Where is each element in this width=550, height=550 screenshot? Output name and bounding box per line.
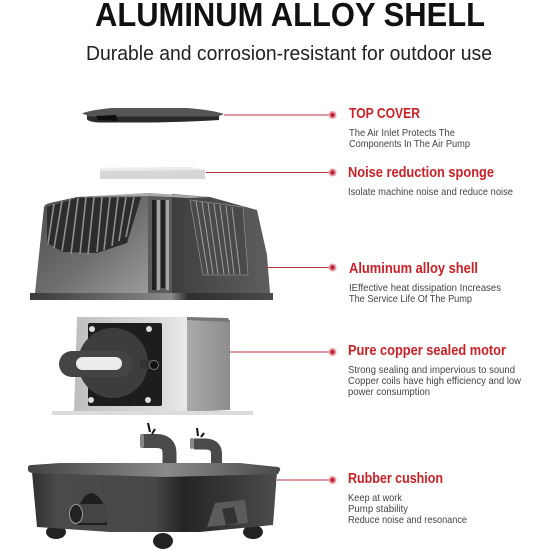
leader line: shell [266, 264, 336, 272]
label: aluminum alloy shell: Aluminum alloy shell [349, 260, 478, 277]
label: pure copper sealed motor: Pure copper sealed motor [348, 342, 506, 359]
label: pure copper sealed motor: Copper coils have high efficiency and low [348, 375, 521, 387]
label: aluminum alloy shell: The Service Life Of The Pump [349, 293, 472, 305]
label: pure copper sealed motor: Strong sealing and impervious to sound [348, 364, 515, 376]
part: top cover [82, 108, 224, 122]
label: top cover [349, 105, 470, 150]
leader line: cushion [277, 476, 336, 484]
label: rubber cushion: Rubber cushion [348, 470, 443, 487]
label: rubber cushion: Reduce noise and resonance [348, 514, 467, 526]
label: top cover: TOP COVER [349, 105, 420, 122]
label: noise reduction sponge: Isolate machine noise and reduce noise [348, 186, 513, 198]
subtitle: Durable and corrosion-resistant for outdoor use [86, 43, 492, 65]
part: noise reduction sponge [100, 167, 205, 179]
label: top cover: Components In The Air Pump [349, 138, 470, 150]
label: rubber cushion: Pump stability [348, 503, 409, 515]
label: noise reduction sponge: Noise reduction sponge [348, 164, 494, 181]
leader line: sponge [206, 168, 336, 176]
label: pure copper sealed motor [348, 342, 521, 398]
leader line: top cover [224, 111, 336, 119]
label: noise reduction sponge [348, 164, 513, 198]
part: pure copper sealed motor [52, 317, 253, 415]
part: rubber cushion base [28, 423, 280, 549]
label: aluminum alloy shell: IEffective heat dissipation Increases [349, 282, 501, 294]
label: pure copper sealed motor: power consumption [348, 386, 430, 398]
part: aluminum alloy shell [30, 193, 273, 300]
label: aluminum alloy shell [349, 260, 501, 305]
leader line: motor [230, 348, 336, 356]
label: top cover: The Air Inlet Protects The [349, 127, 455, 139]
label: rubber cushion [348, 470, 467, 526]
label: rubber cushion: Keep at work [348, 492, 403, 504]
